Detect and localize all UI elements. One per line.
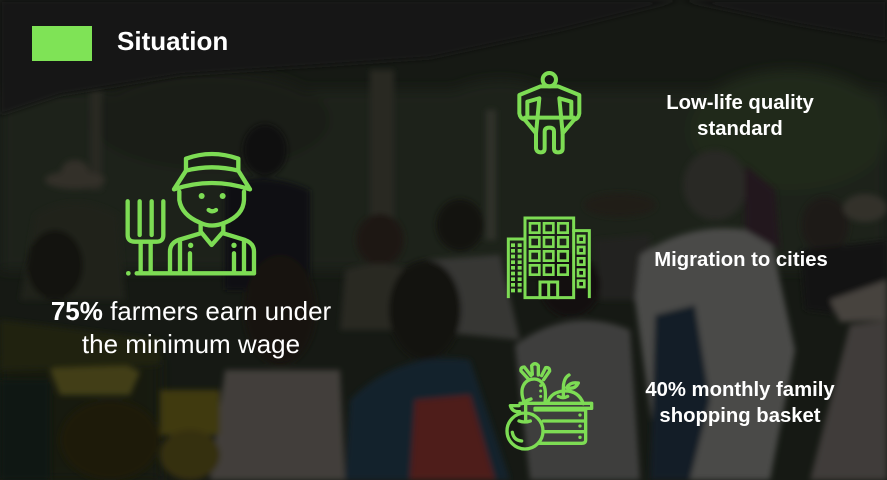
- text: low-life quality standard: [666, 92, 814, 140]
- heading: Situation: Situation: [117, 26, 228, 56]
- text: low-life quality standard: standard: [697, 118, 783, 140]
- text: low-life quality standard: Low-life quality: [666, 92, 814, 114]
- text: 75% farmers earn under the minimum wage: 75% farmers earn under: [51, 296, 331, 326]
- text: 40% monthly family shopping basket: shopping basket: [659, 405, 821, 427]
- legend swatch: [32, 26, 92, 61]
- people: [45, 171, 105, 189]
- text: 40% monthly family shopping basket: [645, 379, 835, 427]
- text: 40% monthly family shopping basket: 40% monthly family: [645, 379, 835, 401]
- text: 75% farmers earn under the minimum wage: the minimum wage: [82, 329, 300, 359]
- tent: [0, 0, 887, 115]
- text: migration to cities: Migration to cities: [654, 249, 828, 271]
- text: 75% farmers earn under the minimum wage: [51, 296, 331, 359]
